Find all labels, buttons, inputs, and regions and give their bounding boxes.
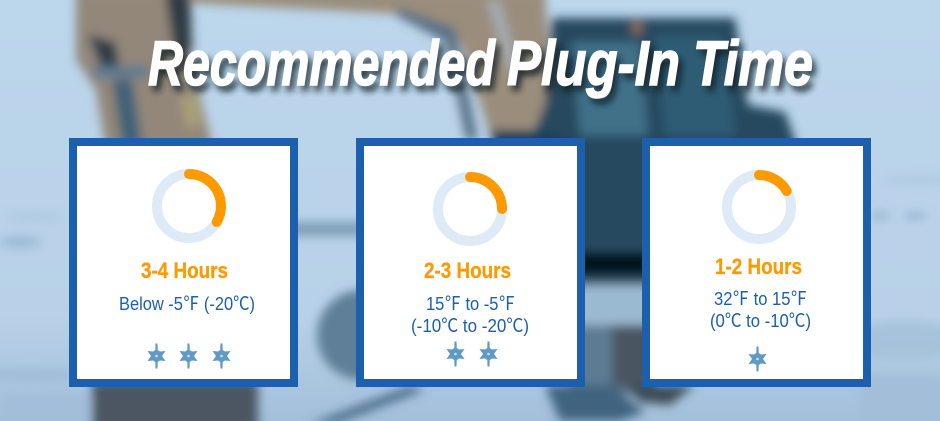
duration: 2-3 Hours	[424, 258, 511, 283]
panel: 3-4 hours	[73, 142, 294, 383]
progress ring: one quarter	[438, 177, 502, 241]
horizon smudges	[290, 222, 365, 236]
temperature range: 32℉ to 15℉	[714, 288, 807, 309]
arm	[190, 0, 552, 135]
progress ring: one sixth	[727, 175, 791, 239]
title: Time	[697, 35, 817, 105]
duration: 3-4 Hours	[141, 258, 228, 283]
ground shadows	[0, 369, 90, 381]
title: Plug-In	[511, 35, 684, 105]
temperature range: Below -5℉ (-20℃)	[119, 293, 255, 314]
progress ring: one third	[157, 174, 221, 238]
temperature range	[710, 288, 811, 331]
tracks	[92, 380, 258, 421]
title	[148, 29, 817, 105]
boom	[76, 0, 225, 300]
temperature range: 15℉ to -5℉	[426, 293, 515, 314]
title: Recommended	[152, 35, 500, 105]
temperature range: (-10℃ to -20℃)	[411, 315, 529, 336]
panel: 1-2 hours	[646, 142, 867, 383]
icons: snowflakes	[148, 344, 230, 368]
temperature range: (0℃ to -10℃)	[710, 310, 811, 331]
icons: snowflakes	[446, 342, 498, 366]
temperature range	[411, 293, 529, 336]
title: Plug-In	[507, 29, 680, 99]
panel: 2-3 hours	[360, 142, 581, 383]
duration: 1-2 Hours	[715, 254, 802, 279]
cab	[530, 18, 795, 300]
title: Recommended	[148, 29, 496, 99]
icon: snowflake	[748, 346, 766, 372]
title: Time	[693, 29, 813, 99]
